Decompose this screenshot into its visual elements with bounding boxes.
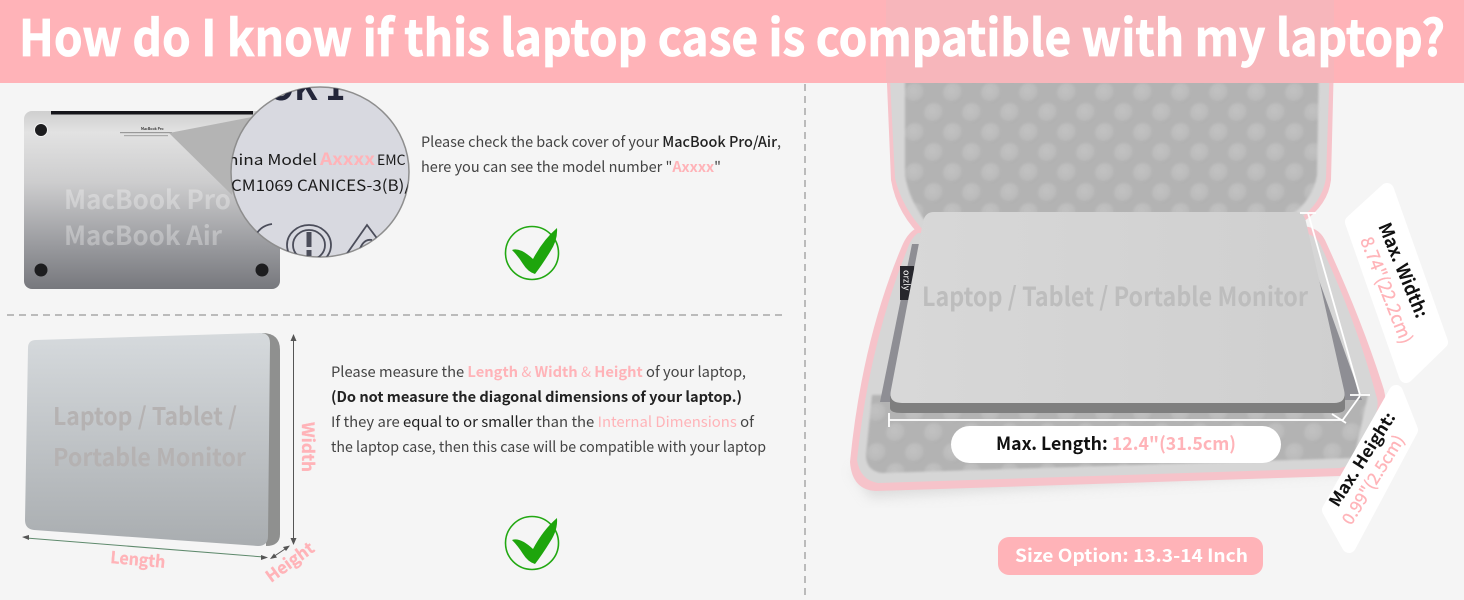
magnifier lens bbox=[230, 86, 410, 258]
model number instructions bbox=[421, 131, 781, 177]
MacBook watermark bbox=[64, 180, 231, 253]
measuring instructions: the laptop case, then this case will be compatible with your laptop bbox=[331, 436, 766, 457]
case lower tray bbox=[850, 226, 1385, 491]
callout: size option bbox=[998, 537, 1263, 575]
illustration label: Laptop / Tablet / bbox=[53, 398, 237, 433]
callout: max height: Max. Height: bbox=[1322, 407, 1400, 511]
title banner bbox=[0, 0, 1464, 83]
measuring instructions: Please measure the Length & Width & Height of your laptop, bbox=[331, 361, 746, 382]
callout: max width: Max. Width: bbox=[1372, 218, 1435, 322]
illustration label: Portable Monitor bbox=[53, 439, 246, 474]
illustration label bbox=[53, 398, 246, 474]
laptop label: Laptop / Tablet / Portable Monitor bbox=[922, 277, 1309, 314]
divider lines bbox=[7, 84, 805, 600]
callout: max width: 8.74"(22.2cm) bbox=[1354, 233, 1420, 347]
callout: size option: Size Option: 13.3-14 Inch bbox=[1015, 542, 1248, 568]
panel: measure your laptop bbox=[22, 333, 766, 587]
MacBook watermark: MacBook Air bbox=[64, 216, 223, 253]
panel: check the model number bbox=[24, 86, 780, 289]
magnifier lens: CM1069 CANICES-3(B)/ bbox=[231, 174, 411, 196]
brand tag: orzly bbox=[900, 270, 914, 291]
measuring instructions: If they are equal to or smaller than the Internal Dimensions of bbox=[331, 411, 755, 432]
MacBook underside bbox=[24, 111, 280, 289]
laptop placeholder in case bbox=[890, 212, 1345, 413]
icon: green check bbox=[506, 226, 558, 280]
icon: green check bbox=[506, 516, 558, 570]
magnifier lens: hina Model bbox=[228, 149, 317, 170]
callout: max length bbox=[951, 426, 1281, 463]
dimension arrows bbox=[22, 334, 296, 560]
MacBook underside: MacBook Pro bbox=[141, 127, 164, 132]
dimension labels: Length bbox=[110, 544, 166, 573]
model number instructions: here you can see the model number "Axxxx" bbox=[421, 156, 721, 177]
dimension labels: Width bbox=[297, 422, 321, 472]
magnifier lens: EMC bbox=[377, 150, 406, 170]
callout: max height: 0.99"(2.5cm) bbox=[1335, 429, 1409, 529]
model number instructions: Please check the back cover of your MacBook Pro/Air, bbox=[421, 131, 781, 152]
case shadow bbox=[852, 400, 1380, 498]
case lid bbox=[886, 60, 1334, 240]
laptop illustration bbox=[25, 333, 280, 546]
MacBook watermark: MacBook Pro bbox=[64, 180, 231, 217]
panel: open laptop case bbox=[850, 60, 1385, 498]
measurement lines bbox=[889, 213, 1370, 427]
magnifier lens: Axxxx bbox=[319, 146, 375, 170]
callout: max length: Max. Length: 12.4"(31.5cm) bbox=[996, 430, 1236, 456]
dimension labels bbox=[110, 422, 321, 587]
callout: max width bbox=[1352, 190, 1441, 376]
measuring instructions bbox=[331, 361, 766, 457]
measuring instructions: (Do not measure the diagonal dimensions of your laptop.) bbox=[331, 386, 742, 407]
magnifier lens: OK 1 bbox=[268, 61, 345, 110]
dimension labels: Height bbox=[260, 535, 318, 587]
callout: max height bbox=[1322, 392, 1411, 546]
dark inner panel bbox=[880, 244, 1362, 402]
brand tag bbox=[900, 266, 914, 300]
magnifier beam bbox=[169, 117, 252, 195]
